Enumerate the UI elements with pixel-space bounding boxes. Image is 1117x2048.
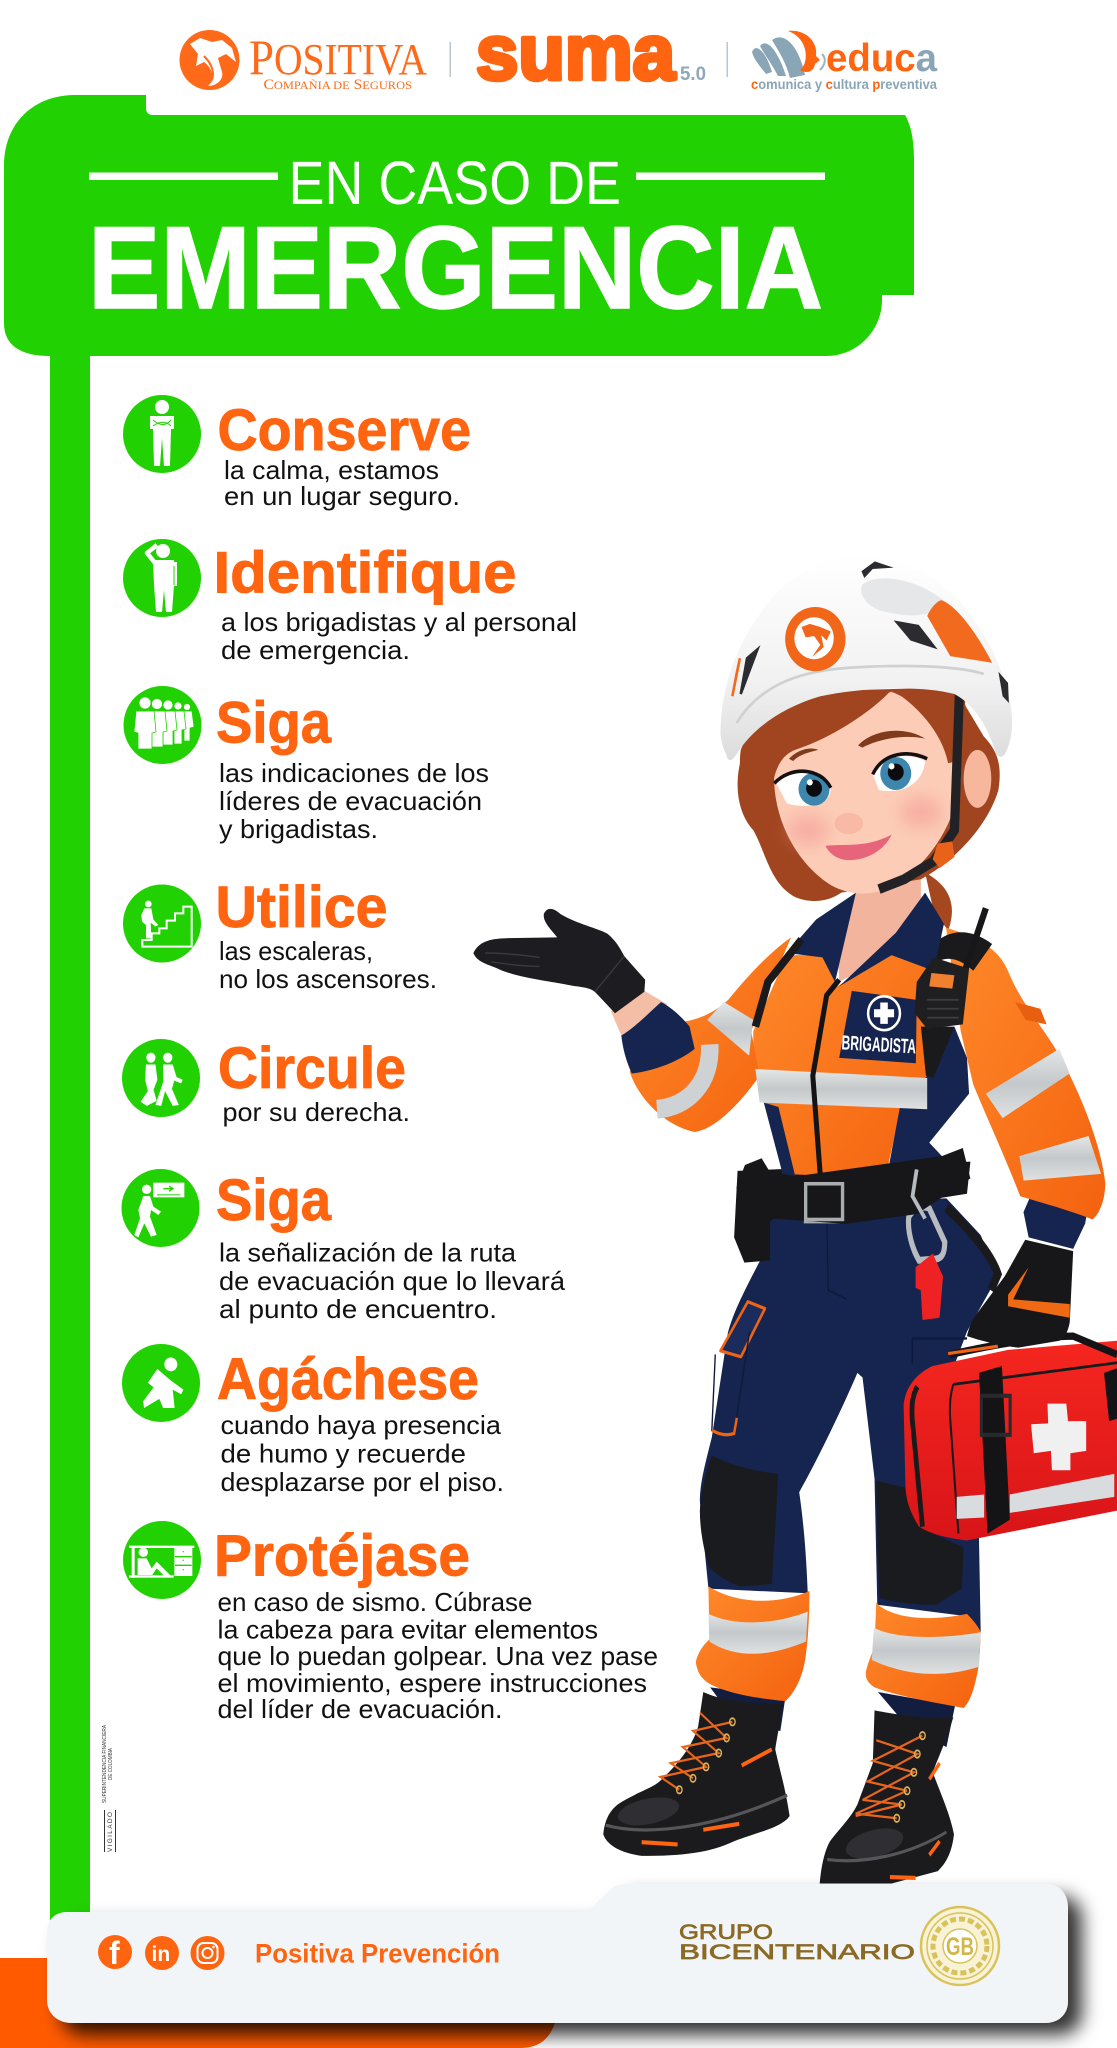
seal: GB bbox=[921, 1907, 999, 1985]
eyes bbox=[774, 754, 927, 806]
logos header bbox=[180, 8, 937, 96]
icon: two walkers bbox=[122, 1039, 200, 1117]
icon: person following exit sign bbox=[122, 1169, 200, 1247]
item: Protéjase: el movimiento, espere instrucciones bbox=[218, 1668, 647, 1698]
title: en caso de: EN CASO DE bbox=[288, 149, 621, 217]
forearm bbox=[611, 991, 667, 1036]
blush bbox=[787, 815, 829, 846]
knee pads bbox=[700, 1456, 778, 1586]
icon: facebook: f bbox=[109, 1935, 120, 1971]
green vertical stripe bbox=[50, 340, 90, 1940]
lower body bbox=[603, 1162, 1117, 1883]
item: Protéjase bbox=[123, 1521, 658, 1724]
nose bbox=[835, 813, 863, 834]
vigilado seal bbox=[102, 1725, 116, 1852]
ankles bbox=[710, 1687, 955, 1747]
item: Conserve bbox=[123, 395, 471, 511]
logo: educa bbox=[751, 31, 937, 92]
item: Circule: Circule bbox=[218, 1036, 406, 1101]
ear bbox=[964, 750, 991, 808]
open glove hand bbox=[473, 909, 645, 1013]
item: Conserve: en un lugar seguro. bbox=[224, 481, 460, 511]
icon: arms crossed bbox=[123, 395, 201, 473]
item: Siga: líderes de evacuación bbox=[219, 786, 482, 816]
item: Siga señalización bbox=[122, 1168, 566, 1324]
title: emergencia: EMERGENCIA bbox=[88, 202, 823, 333]
item: Identifique: Identifique bbox=[214, 540, 516, 606]
harness strap bbox=[946, 1208, 998, 1290]
lips bbox=[825, 835, 892, 860]
illustration: brigadista character bbox=[473, 556, 1117, 1883]
first aid bag bbox=[904, 1336, 1117, 1540]
item: Agáchese: cuando haya presencia bbox=[220, 1410, 502, 1440]
item: Agáchese: Agáchese bbox=[217, 1347, 479, 1412]
vigilado seal: SUPERINTENDENCIA FINANCIERA bbox=[102, 1725, 108, 1803]
item: Utilice: las escaleras, bbox=[219, 936, 373, 966]
social handle: Positiva Prevención bbox=[255, 1939, 500, 1969]
orange corner block bbox=[0, 1958, 556, 2048]
logo: suma 5.0: suma bbox=[476, 8, 676, 96]
face bbox=[774, 692, 961, 894]
trousers bbox=[700, 1198, 998, 1632]
item: Siga señalización: de evacuación que lo llevará bbox=[219, 1266, 566, 1296]
harness strap bbox=[755, 940, 801, 1027]
vigilado seal: DE COLOMBIA bbox=[108, 1748, 114, 1780]
trouser cuffs bbox=[696, 1586, 809, 1701]
item: Agáchese bbox=[122, 1344, 504, 1497]
logo: Positiva bbox=[180, 29, 427, 93]
Grupo Bicentenario wordmark: BICENTENARIO bbox=[679, 1941, 915, 1964]
item: Circule: por su derecha. bbox=[222, 1097, 410, 1127]
item: Protéjase: del líder de evacuación. bbox=[218, 1694, 502, 1724]
brows bbox=[858, 731, 925, 748]
item: Utilice: no los ascensores. bbox=[219, 964, 437, 994]
item: Conserve: Conserve bbox=[218, 398, 471, 463]
item: Identifique: de emergencia. bbox=[221, 635, 410, 665]
item: Identifique bbox=[123, 539, 577, 665]
back harness bbox=[933, 932, 992, 971]
belt top bbox=[737, 1148, 970, 1240]
item: Conserve: la calma, estamos bbox=[224, 455, 439, 485]
item: Circule bbox=[122, 1036, 410, 1127]
item: Protéjase: que lo puedan golpear. Una vez pase bbox=[218, 1641, 658, 1671]
title banner bbox=[4, 95, 914, 356]
item: Agáchese: desplazarse por el piso. bbox=[220, 1467, 504, 1497]
icon: stairs bbox=[123, 884, 201, 962]
Grupo Bicentenario wordmark bbox=[679, 1921, 915, 1964]
logo: educa: comunica y cultura preventiva bbox=[751, 77, 937, 92]
icon: line of people bbox=[124, 686, 202, 764]
radio bbox=[915, 908, 986, 1029]
left cuff bbox=[621, 1002, 695, 1073]
upper body bbox=[473, 556, 1105, 1240]
vigilado seal: VIGILADO bbox=[107, 1812, 114, 1852]
right cuff and glove bbox=[1023, 1185, 1090, 1249]
icon: crouching person bbox=[122, 1344, 200, 1422]
right arm bbox=[946, 928, 1105, 1219]
helmet logo bbox=[785, 607, 845, 671]
icon: person under desk bbox=[123, 1521, 201, 1599]
fringe bbox=[740, 690, 892, 835]
item: Utilice bbox=[123, 875, 437, 994]
badge bbox=[839, 991, 917, 1063]
whistle bbox=[916, 1253, 943, 1320]
hair back bbox=[738, 687, 1000, 901]
belt and pouch bbox=[734, 1162, 970, 1263]
seal: GB: GB bbox=[946, 1933, 974, 1961]
icon: facebook bbox=[98, 1935, 132, 1971]
item: Protéjase: en caso de sismo. Cúbrase bbox=[218, 1587, 532, 1617]
neck bbox=[837, 870, 921, 982]
left arm sleeve bbox=[630, 937, 791, 1132]
item: Utilice: Utilice bbox=[216, 875, 388, 940]
carabiner bbox=[908, 1207, 945, 1260]
Grupo Bicentenario wordmark: GRUPO bbox=[679, 1921, 773, 1944]
item: Siga bbox=[124, 686, 489, 844]
logo: Positiva: POSITIVA bbox=[249, 29, 427, 85]
footer panel bbox=[47, 1884, 1068, 2023]
logo: Positiva: COMPAÑIA DE SEGUROS bbox=[264, 77, 412, 93]
collar bbox=[787, 893, 856, 982]
torso bbox=[753, 928, 942, 1178]
item: Siga señalización: Siga bbox=[216, 1168, 332, 1233]
item: Siga señalización: la señalización de la ruta bbox=[219, 1238, 517, 1268]
icon: instagram bbox=[190, 1936, 224, 1970]
reflective chest band bbox=[755, 1069, 927, 1109]
title lines bbox=[89, 172, 825, 180]
ponytail bbox=[925, 873, 952, 931]
helmet straps bbox=[879, 692, 959, 889]
item: Siga señalización: al punto de encuentro. bbox=[219, 1294, 497, 1324]
item: Protéjase: Protéjase bbox=[214, 1524, 470, 1588]
item: Agáchese: de humo y recuerde bbox=[220, 1439, 466, 1469]
boots bbox=[603, 1692, 790, 1856]
item: Siga: Siga bbox=[216, 690, 332, 756]
item: Identifique: a los brigadistas y al personal bbox=[221, 607, 577, 637]
icon: linkedin bbox=[145, 1936, 179, 1970]
logo: educa: educa bbox=[826, 37, 937, 80]
item: Siga: y brigadistas. bbox=[219, 814, 378, 844]
badge: BRIGADISTA bbox=[841, 1030, 917, 1058]
helmet bbox=[720, 556, 1012, 760]
icon: person saluting bbox=[123, 539, 201, 617]
item: Protéjase: la cabeza para evitar elementos bbox=[218, 1614, 598, 1644]
zipper bbox=[813, 980, 839, 1176]
item: Siga: las indicaciones de los bbox=[219, 758, 489, 788]
logo: suma 5.0: 5.0 bbox=[680, 64, 706, 85]
icon: linkedin: in bbox=[152, 1943, 170, 1966]
